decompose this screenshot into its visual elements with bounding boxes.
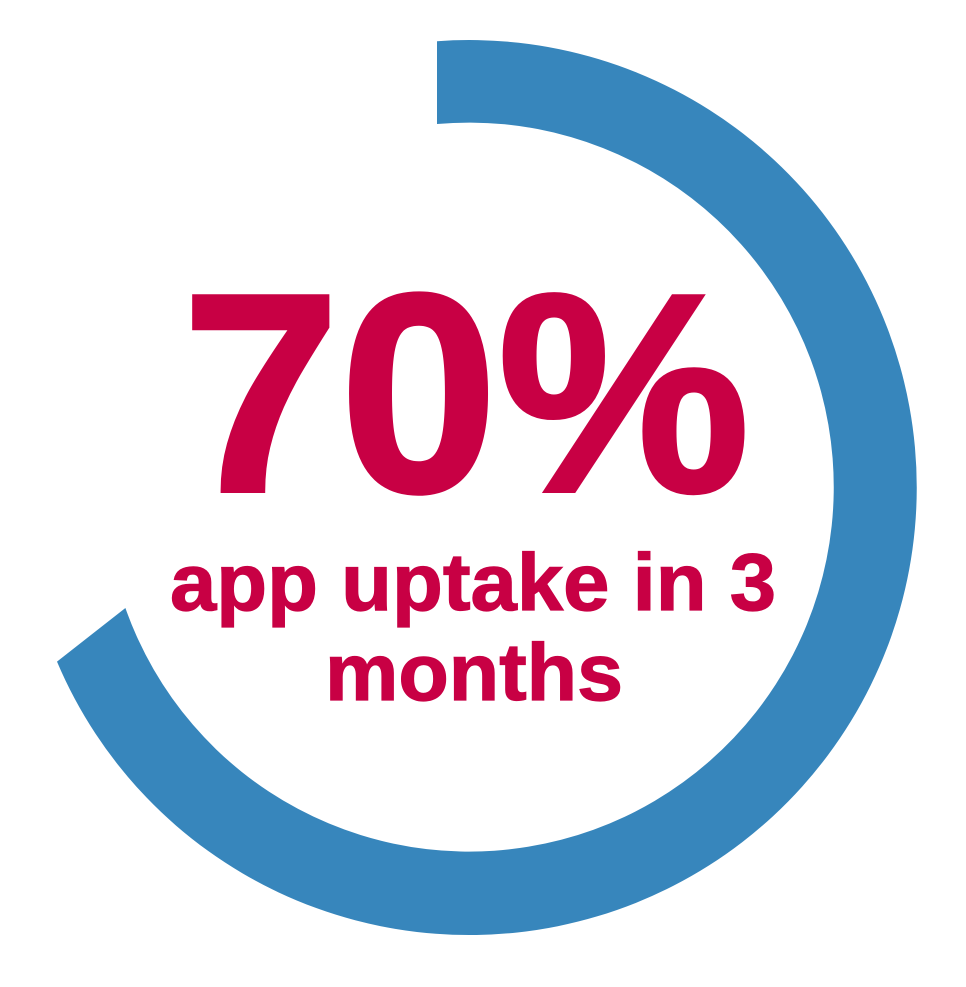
caption line 2: months <box>325 628 623 718</box>
caption line 1: app uptake in 3 <box>170 538 776 628</box>
big number: 70%: 70% <box>182 235 750 551</box>
